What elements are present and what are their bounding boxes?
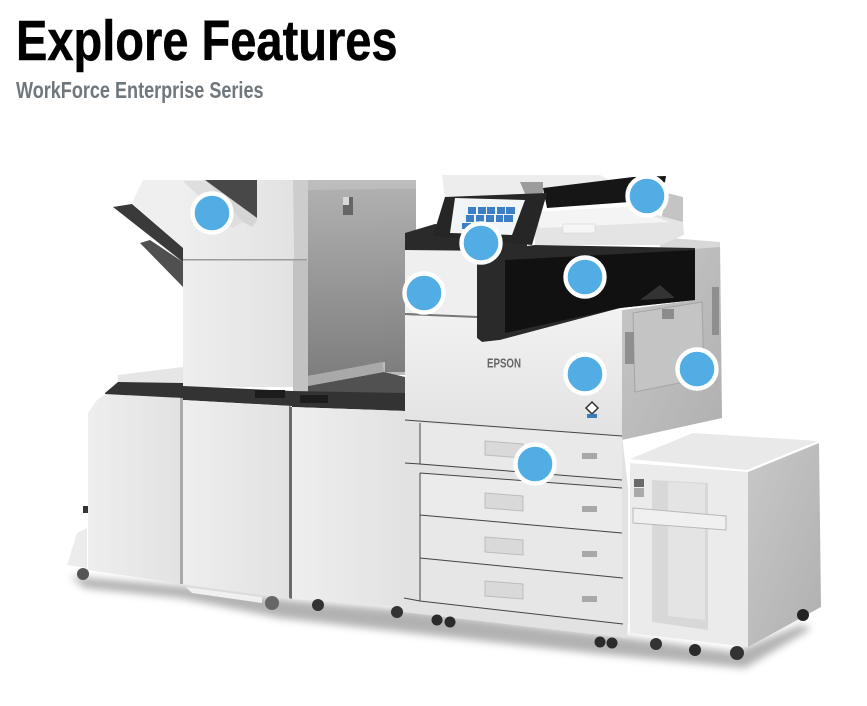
hotspot: document feeder bbox=[628, 176, 666, 216]
finisher tower bbox=[183, 180, 416, 393]
hotspot: finisher bbox=[192, 194, 232, 232]
floor shadow bbox=[70, 576, 812, 668]
brand label: EPSON bbox=[487, 356, 521, 370]
main printer right side and door bbox=[622, 238, 722, 440]
title: Explore Features bbox=[16, 9, 398, 73]
middle base cabinets bbox=[183, 386, 405, 618]
logo badge bbox=[586, 402, 598, 418]
hotspot: side tray bbox=[678, 350, 716, 388]
hotspot: front cover bbox=[566, 354, 604, 394]
drawer handles bbox=[485, 441, 523, 599]
hotspot: front left bbox=[404, 274, 444, 312]
touch screen icons bbox=[462, 207, 515, 229]
hotspot: paper drawer bbox=[516, 444, 554, 484]
paper drawers bbox=[403, 419, 628, 648]
high capacity paper cabinet bbox=[630, 433, 821, 660]
left base cabinet bbox=[67, 367, 183, 584]
hotspot: touch panel bbox=[462, 224, 500, 262]
drawer labels bbox=[582, 453, 597, 602]
hotspot: output tray bbox=[566, 258, 604, 296]
scanner and document feeder bbox=[442, 175, 684, 245]
control panel bbox=[405, 193, 547, 251]
main printer front body bbox=[405, 250, 622, 436]
subtitle: WorkForce Enterprise Series bbox=[16, 77, 264, 103]
output bay bbox=[477, 245, 695, 342]
finisher wing and output trays bbox=[113, 180, 183, 287]
